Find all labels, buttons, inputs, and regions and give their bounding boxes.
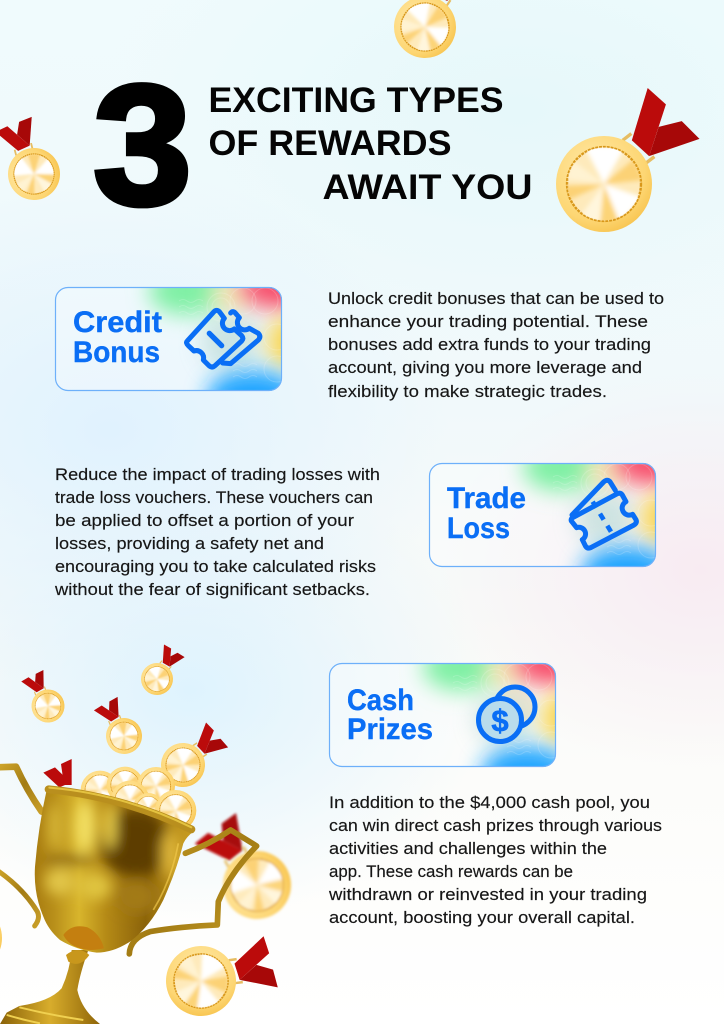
- medal: top left: [0, 106, 78, 208]
- text block: trade loss description: [54, 465, 380, 599]
- text block: credit bonus description: bonuses add extra funds to your trading: [328, 335, 651, 354]
- card label: [347, 684, 433, 746]
- text block: trade loss description: without the fear of significant setbacks.: [54, 580, 370, 599]
- text block: cash prizes description: activities and challenges within the: [329, 839, 607, 858]
- heading lines: AWAIT YOU: [322, 168, 532, 207]
- icon: coins: [478, 687, 535, 742]
- text block: trade loss description: encouraging you to take calculated risks: [55, 557, 376, 576]
- coins in cup: [81, 767, 196, 831]
- text block: cash prizes description: withdrawn or reinvested in your trading: [328, 885, 647, 904]
- medal: flying above cup: [160, 720, 230, 790]
- trophy handles: [0, 767, 257, 954]
- medal: bottom right: [153, 903, 296, 1024]
- heading lines: [208, 81, 532, 207]
- panel: credit bonus card: [55, 265, 317, 423]
- text block: cash prizes description: can win direct cash prizes through various: [329, 816, 662, 835]
- card label: Loss: [447, 512, 510, 545]
- text block: trade loss description: be applied to offset a portion of your: [55, 511, 355, 530]
- medal: top center: [376, 0, 493, 66]
- card label: Cash: [347, 684, 414, 717]
- title: [93, 50, 532, 241]
- text block: credit bonus description: account, giving you more leverage and: [328, 358, 642, 377]
- trophy with medals: [0, 759, 257, 1024]
- heading lines: EXCITING TYPES: [208, 81, 504, 120]
- text block: credit bonus description: enhance your trading potential. These: [328, 312, 648, 331]
- icon: tickets: [187, 310, 260, 367]
- medal: flying far left: [12, 665, 74, 727]
- text block: cash prizes description: In addition to the $4,000 cash pool, you: [329, 793, 650, 812]
- icon: coins: $: [491, 703, 509, 738]
- heading lines: OF REWARDS: [208, 124, 452, 163]
- icon: tickets: [571, 480, 636, 548]
- medal: top right large: [556, 88, 700, 232]
- medal: flying top: [134, 641, 192, 698]
- text block: credit bonus description: [328, 289, 664, 401]
- medal: flying middle: [84, 692, 151, 758]
- cup rim: [49, 789, 191, 829]
- panel: cash prizes card: [329, 641, 591, 799]
- text block: trade loss description: Reduce the impact of trading losses with: [55, 465, 380, 484]
- text block: trade loss description: trade loss vouchers. These vouchers can: [55, 488, 373, 507]
- text block: cash prizes description: account, boosting your overall capital.: [329, 908, 635, 927]
- trophy base: [0, 950, 100, 1024]
- card label: Credit: [73, 306, 162, 339]
- card label: Bonus: [73, 336, 160, 369]
- ribbon behind cup: [43, 759, 72, 787]
- panel: trade loss card: [429, 441, 691, 599]
- text block: trade loss description: losses, providing a safety net and: [55, 534, 324, 553]
- text block: cash prizes description: [328, 793, 662, 927]
- trophy cup: [35, 788, 193, 953]
- card label: [73, 306, 162, 369]
- text block: credit bonus description: flexibility to make strategic trades.: [328, 382, 607, 401]
- big numeral 3: 3: [93, 50, 192, 241]
- text block: cash prizes description: app. These cash rewards can be: [329, 862, 573, 881]
- cup foot neck: [63, 926, 104, 950]
- card label: [447, 482, 526, 545]
- card label: Prizes: [347, 713, 433, 746]
- card label: Trade: [447, 482, 526, 515]
- medal: left edge fragment: [0, 904, 2, 972]
- medal: blurred behind trophy: [185, 808, 301, 924]
- text block: credit bonus description: Unlock credit bonuses that can be used to: [328, 289, 664, 308]
